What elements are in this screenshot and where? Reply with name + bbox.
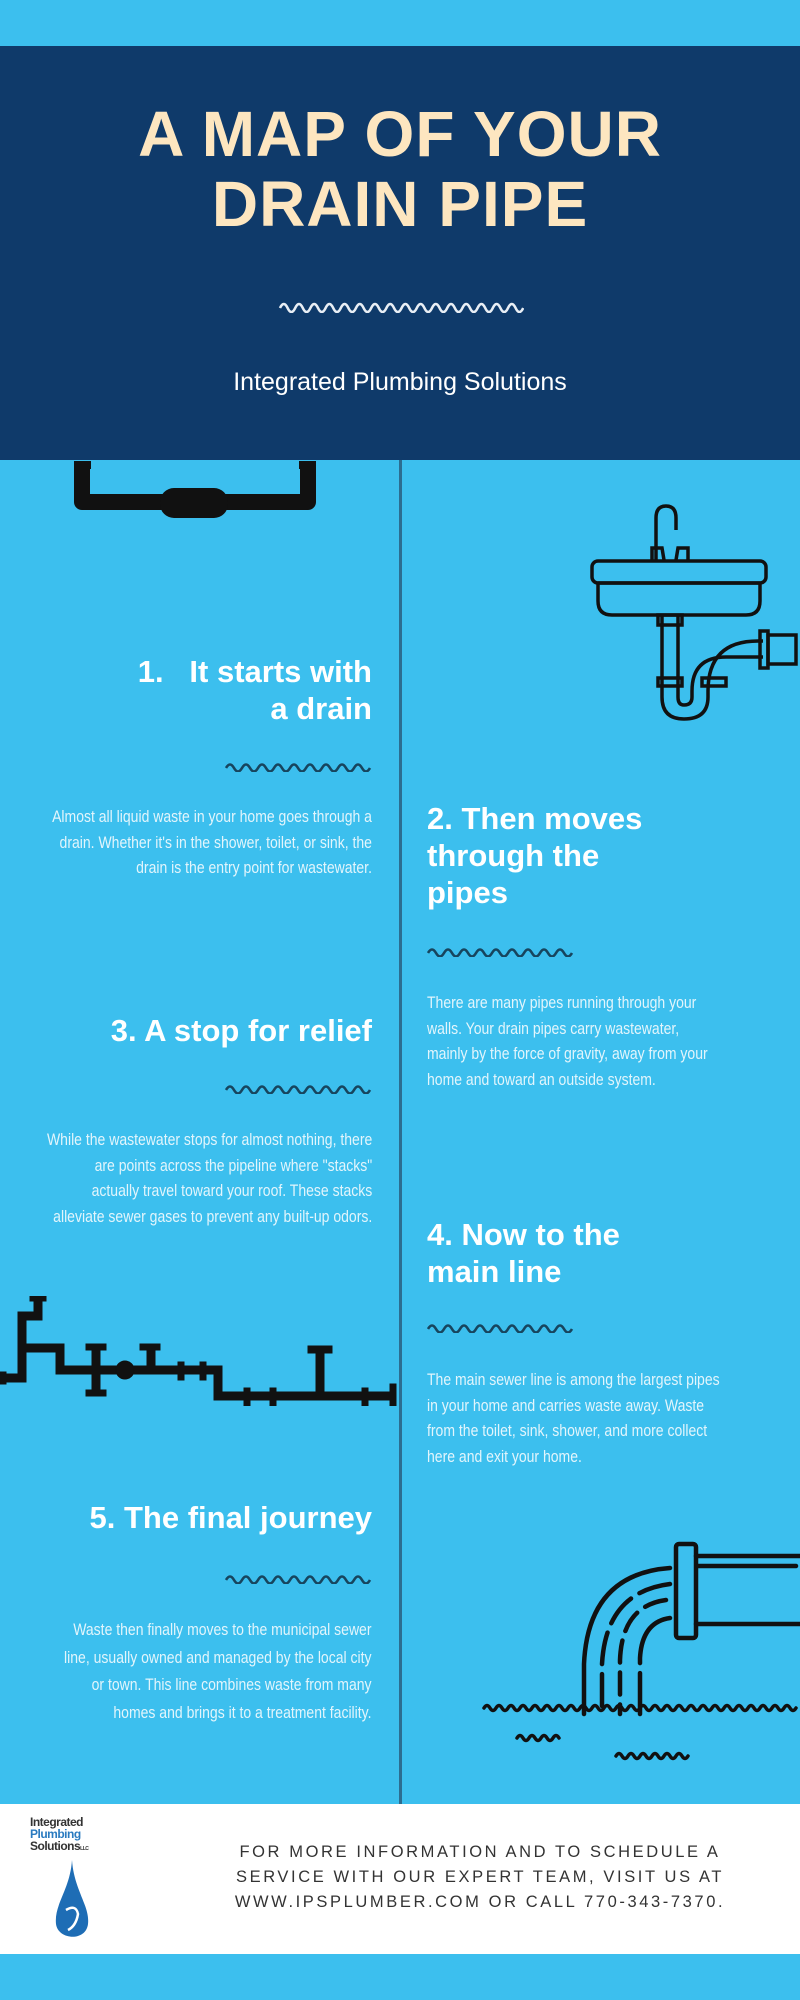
text 1: Almost all liquid waste in your home goes through a <box>52 808 372 826</box>
title: A MAP OF YOUR <box>138 98 662 170</box>
text 1 <box>52 808 372 877</box>
icon: drop <box>56 1860 88 1937</box>
text 5: or town. This line combines waste from many <box>92 1676 372 1694</box>
text 3 <box>47 1131 372 1226</box>
center divider <box>399 460 402 1805</box>
call to action: FOR MORE INFORMATION AND TO SCHEDULE A SERVICE WITH OUR EXPERT TEAM, VISIT US AT WWW.IPSPLUMBER.COM OR CALL 770-343-7370. <box>235 1843 725 1911</box>
heading 2: through the <box>427 838 599 873</box>
heading 2: pipes <box>427 875 508 910</box>
decorative wave <box>278 302 524 313</box>
text 1: drain. Whether it's in the shower, toilet, or sink, the <box>60 834 372 852</box>
icon: pipe network <box>0 1296 396 1406</box>
heading 5: 5. The final journey <box>90 1500 372 1535</box>
wave 2 <box>427 948 573 957</box>
icon: sink <box>590 504 798 721</box>
text 2 <box>427 994 708 1089</box>
text 4 <box>427 1371 720 1466</box>
text 2: home and toward an outside system. <box>427 1071 656 1089</box>
heading 2: 2. Then moves <box>427 801 642 836</box>
heading 4: 4. Now to the <box>427 1217 620 1252</box>
text 4: here and exit your home. <box>427 1448 582 1466</box>
text 4: in your home and carries waste away. Waste <box>427 1397 704 1415</box>
text 3: actually travel toward your roof. These stacks <box>91 1182 372 1200</box>
text 3: are points across the pipeline where "stacks" <box>94 1157 372 1175</box>
text 4: from the toilet, sink, shower, and more collect <box>427 1422 707 1440</box>
text 5 <box>64 1621 372 1722</box>
text 2: There are many pipes running through your <box>427 994 696 1012</box>
text 5: line, usually owned and managed by the local city <box>65 1648 372 1666</box>
heading 4: main line <box>427 1254 561 1289</box>
logo <box>30 1815 89 1937</box>
heading 1: a drain <box>270 691 372 726</box>
text 4: The main sewer line is among the largest pipes <box>427 1371 720 1389</box>
logo text: Plumbing <box>30 1827 81 1841</box>
wave 5 <box>225 1575 371 1584</box>
heading 2 <box>427 801 642 910</box>
text 1: drain is the entry point for wastewater. <box>136 859 372 877</box>
title <box>138 98 662 240</box>
text 5: Waste then finally moves to the municipal sewer <box>74 1621 372 1639</box>
text 5: homes and brings it to a treatment facility. <box>114 1704 372 1722</box>
text 2: mainly by the force of gravity, away from your <box>427 1045 708 1063</box>
text 3: alleviate sewer gases to prevent any built-up odors. <box>53 1208 372 1226</box>
wave 1 <box>225 763 371 772</box>
logo text: SolutionsLLC <box>30 1839 88 1853</box>
text 3: While the wastewater stops for almost nothing, there <box>47 1131 372 1149</box>
text 2: walls. Your drain pipes carry wastewater, <box>427 1020 679 1038</box>
heading 1: 1. It starts with <box>138 654 372 689</box>
subtitle: Integrated Plumbing Solutions <box>233 368 567 396</box>
heading 1 <box>138 654 372 726</box>
logo text <box>30 1815 89 1853</box>
title: DRAIN PIPE <box>212 168 588 240</box>
header panel <box>0 46 800 460</box>
icon: top pipe <box>74 461 316 518</box>
footer panel <box>0 1804 800 1954</box>
logo text: Integrated <box>30 1815 83 1829</box>
heading 3: 3. A stop for relief <box>111 1013 372 1048</box>
icon: outlet pipe <box>482 1542 800 1760</box>
wave 4 <box>427 1324 573 1333</box>
heading 4 <box>427 1217 620 1289</box>
wave 3 <box>225 1085 371 1094</box>
